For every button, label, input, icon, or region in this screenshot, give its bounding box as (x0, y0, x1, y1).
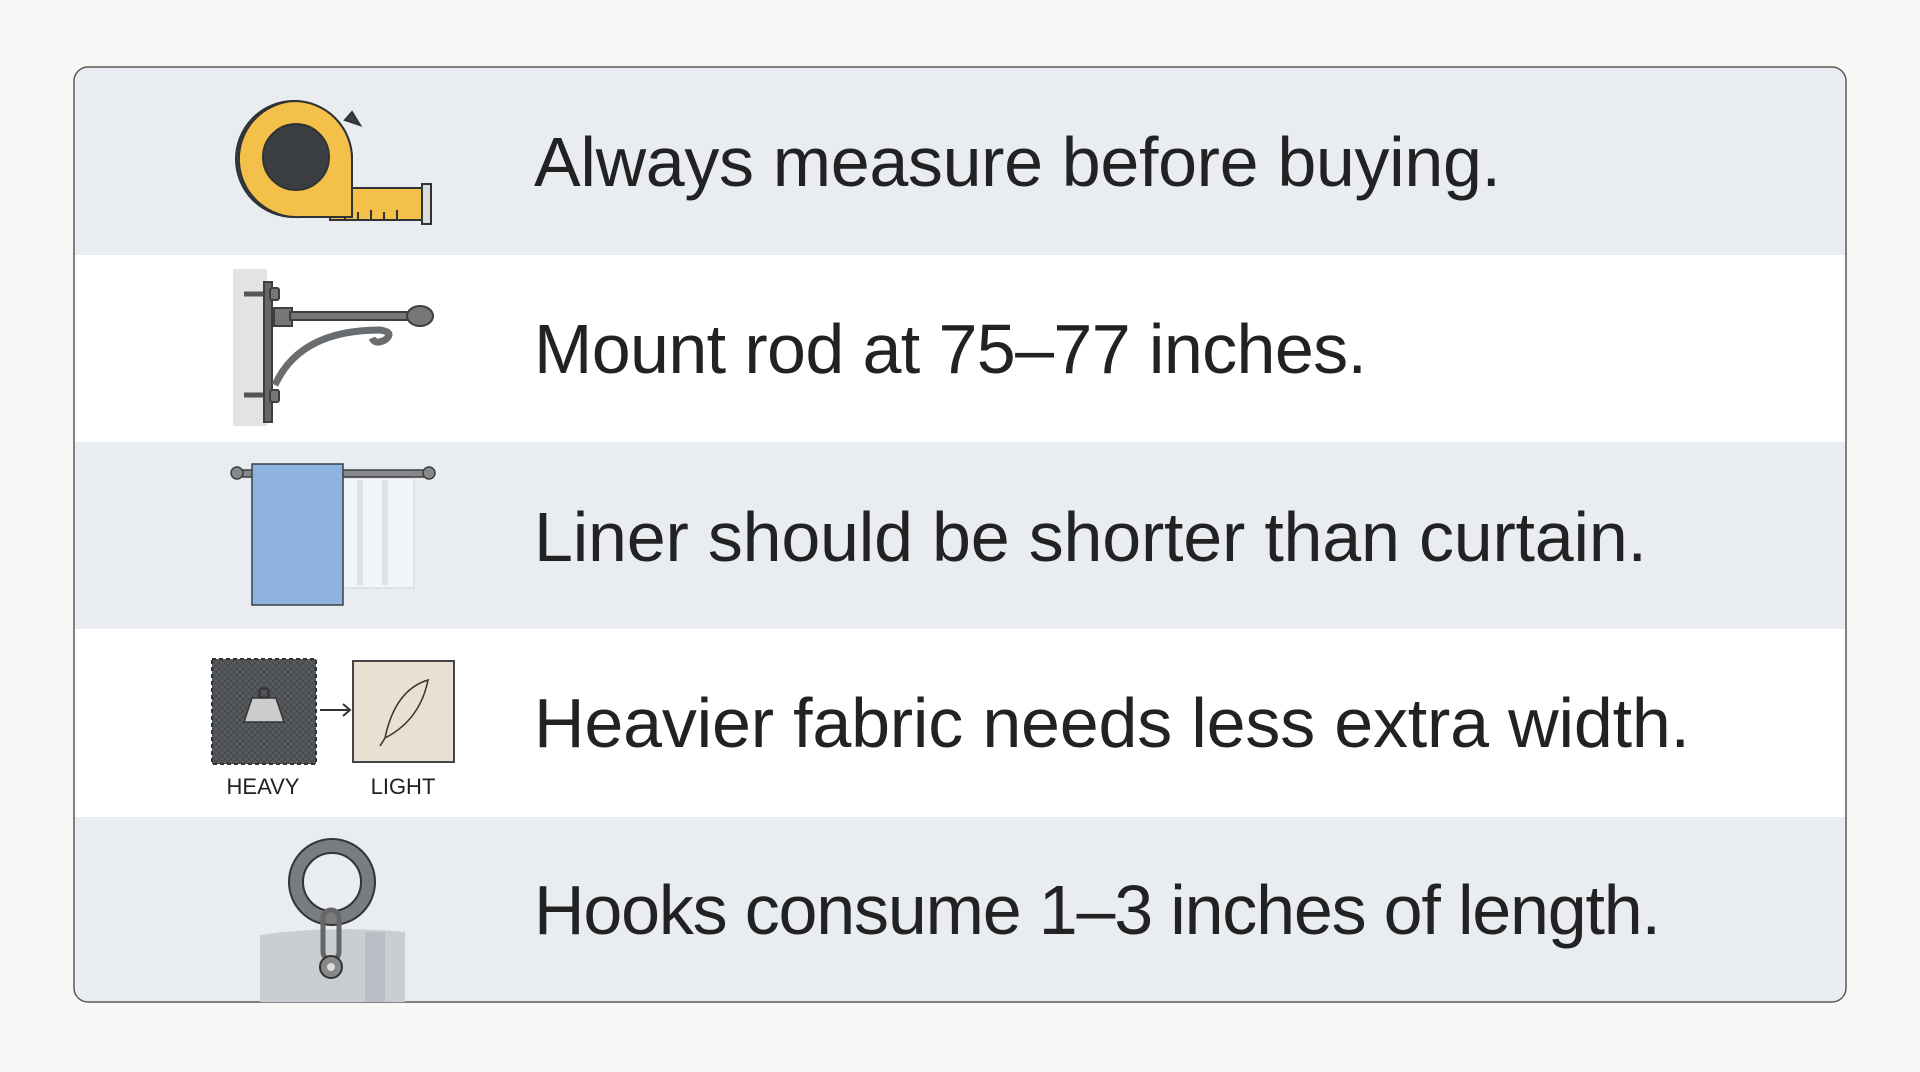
text: fabric: Heavier fabric needs less extra width. (534, 684, 1690, 762)
icon: bracket (233, 269, 433, 426)
icon: hook ring (260, 846, 405, 1002)
icon: heavy fabric (212, 659, 316, 764)
arrow (320, 704, 350, 716)
row 4: fabric weight (212, 659, 1690, 799)
icon: light fabric (353, 661, 454, 762)
icon: tape measure (236, 101, 431, 224)
row 1: measure (236, 101, 1501, 224)
icon: curtain and liner (231, 464, 435, 605)
row 2: mount rod (233, 269, 1367, 426)
row 3: liner (231, 464, 1647, 605)
text: measure: Always measure before buying. (534, 123, 1501, 201)
text: mount rod: Mount rod at 75–77 inches. (534, 310, 1367, 388)
text: hooks: Hooks consume 1–3 inches of length. (534, 871, 1661, 949)
label: light: LIGHT (371, 774, 435, 799)
text: liner: Liner should be shorter than curtain. (534, 498, 1647, 576)
row 5: hooks (260, 846, 1661, 1002)
label: heavy: HEAVY (227, 774, 300, 799)
